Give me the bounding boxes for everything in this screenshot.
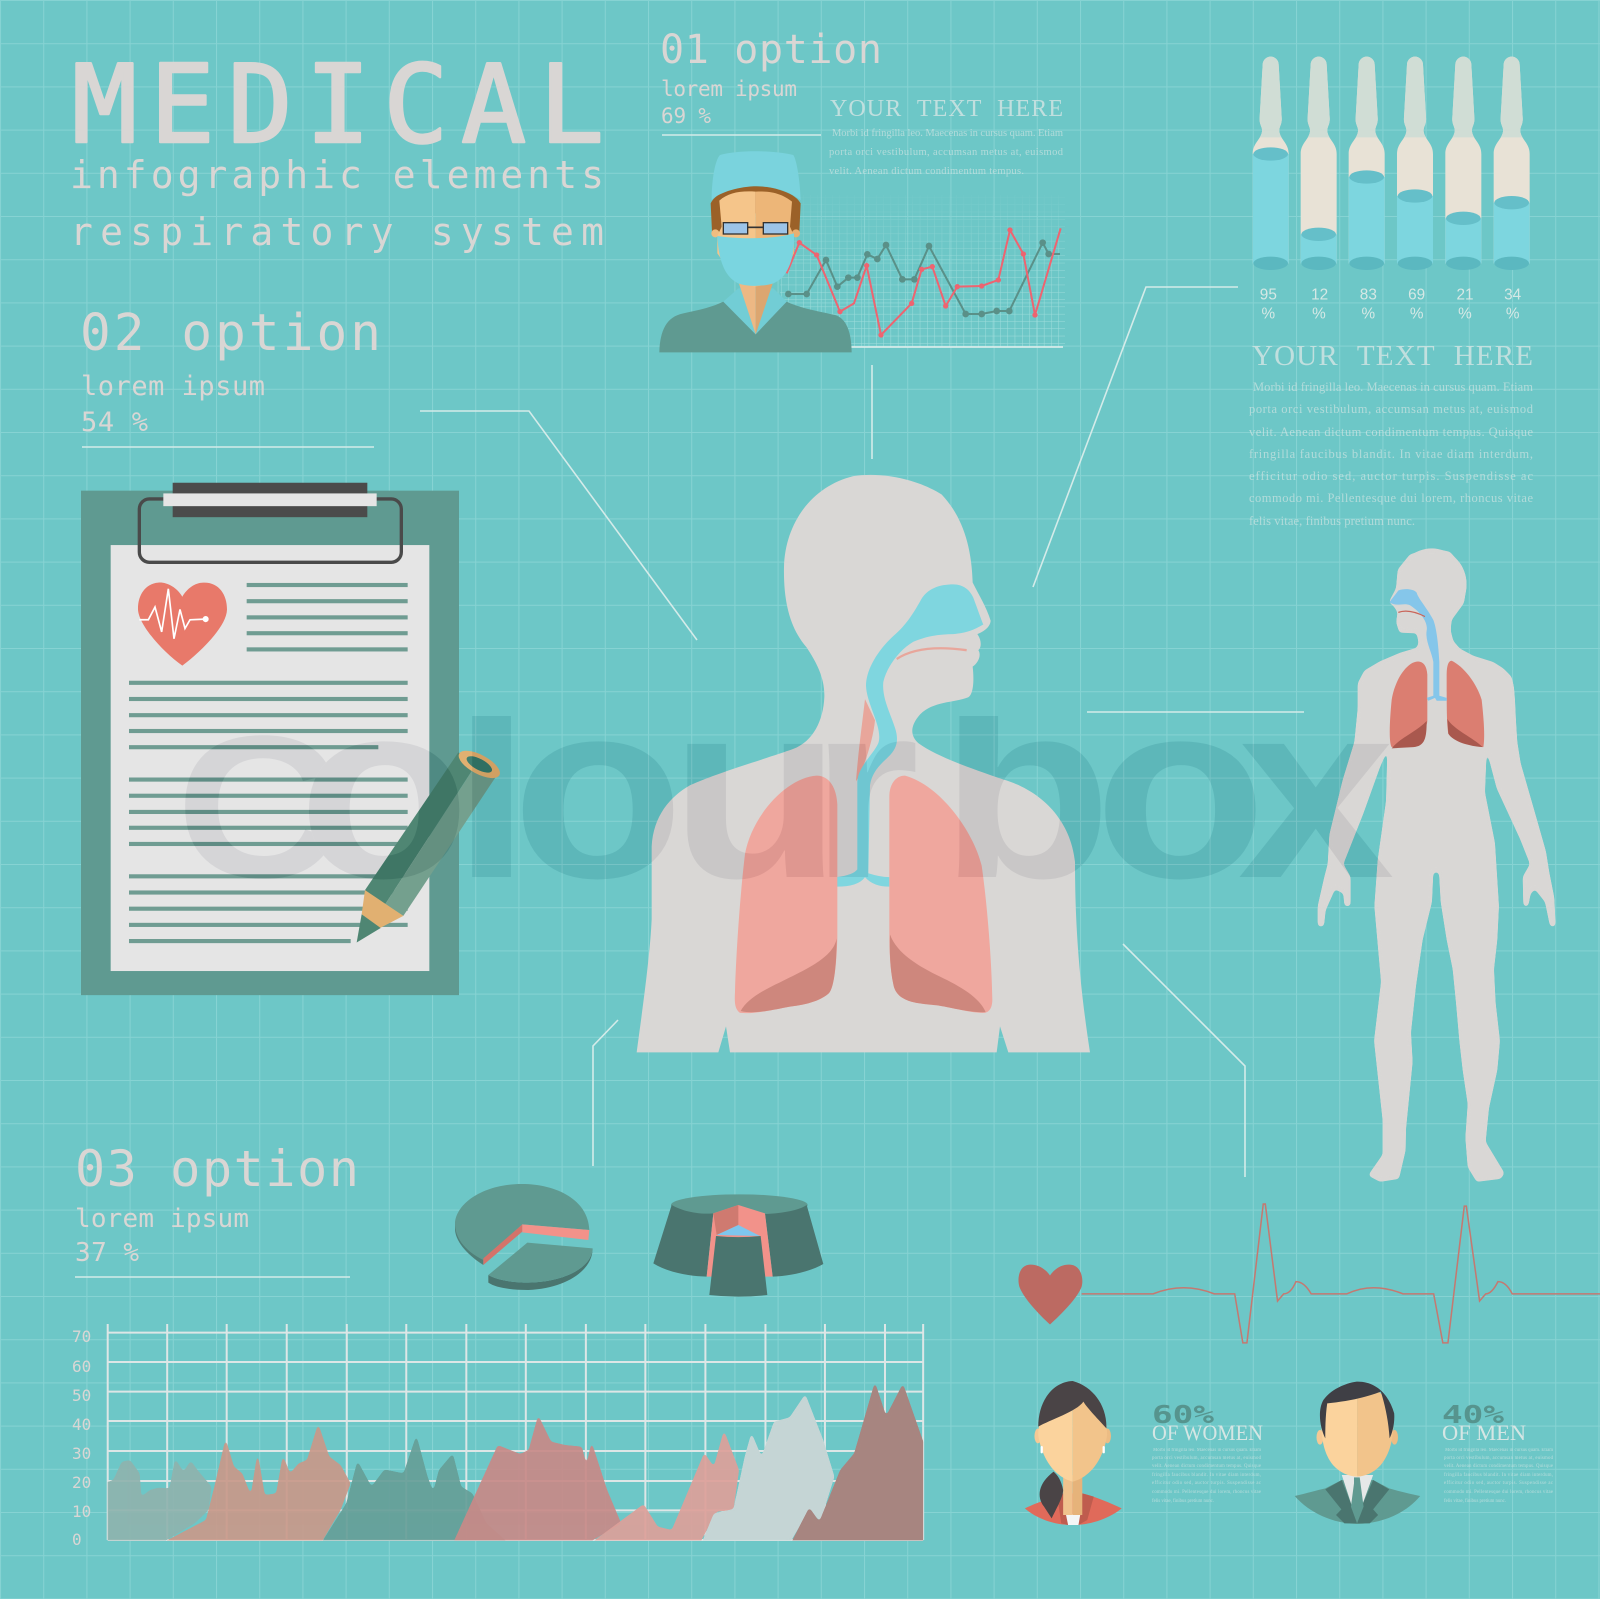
area series 2 [161,1423,351,1543]
body copy (right): felis vitae, finibus pretium nunc. [1249,514,1415,528]
area series group [94,1382,936,1543]
text: lorem ipsum (01): lorem ipsum [661,77,797,101]
body copy (right): efficitur odio sed, auctor turpis. Suspendisse ac [1249,469,1533,483]
ampoule 21 [1445,57,1481,270]
percent labels: 34 [1504,286,1522,303]
option 01 label [660,27,882,135]
percent labels: 69 [1408,286,1425,303]
option 03 label [75,1140,359,1277]
stat: 40% of men [1442,1400,1554,1504]
heading: your text here (right): YOUR TEXT HERE [1252,340,1533,372]
heading: 02 option: 02 option [80,304,381,363]
series: red line [787,227,1061,338]
right lung [889,776,992,1013]
full body figure with lungs [1318,548,1556,1182]
area series 1 [108,1460,212,1540]
ampoule 95 [1253,57,1289,270]
line chart with fine grid [780,195,1065,347]
small copy (men): felis vitae, finibus pretium nunc. [1444,1499,1506,1504]
ampoule 12 [1301,57,1337,270]
stat: 60% of women [1152,1400,1263,1504]
icon: pencil [357,745,504,942]
small copy (women): porta orci vestibulum, accumsan metus at, euismod [1152,1456,1262,1461]
small copy (men): commodo mi. Pellentesque dui lorem, rhoncus vitae [1444,1490,1553,1495]
body copy (right): porta orci vestibulum, accumsan metus at, euismod [1249,402,1534,416]
percent labels: % [1312,306,1326,323]
small copy (women): felis vitae, finibus pretium nunc. [1152,1499,1214,1504]
esophagus [856,699,875,781]
avatar: man [1295,1382,1420,1524]
title block [70,43,604,254]
text lines [129,583,408,943]
small copy (women) [1152,1448,1262,1504]
label: of women: OF WOMEN [1152,1420,1263,1445]
body copy: Morbi id fringilla leo. Maecenas in cursus quam. Etiam [832,128,1063,139]
percent labels: 95 [1260,286,1277,303]
central torso with respiratory system [637,475,1090,1052]
body copy (right): commodo mi. Pellentesque dui lorem, rhoncus vitae [1249,491,1533,505]
y axis labels: 40 [72,1415,91,1434]
small copy (men): efficitur odio sed, auctor turpis. Suspendisse ac [1444,1481,1553,1486]
clipboard with report [81,483,504,995]
text: 54 percent: 54 % [81,407,148,438]
watermark: Colourbox [185,716,1392,880]
subtitle: infographic elements: infographic elements [70,153,604,197]
y axis labels: 0 [72,1530,82,1549]
heading: your text here: YOUR TEXT HERE [830,96,1063,122]
percent labels [1260,286,1522,323]
percent labels: % [1262,306,1276,323]
icon: heart with pulse [138,583,227,666]
small copy (men) [1444,1448,1554,1504]
area series 6 [701,1394,834,1543]
subtitle: respiratory system: respiratory system [70,210,604,254]
percent labels: % [1362,306,1376,323]
pie chart 3D [455,1184,593,1290]
percent labels: 12 [1311,286,1328,303]
series: grey line [785,239,1060,317]
body copy (right): fringilla faucibus blandit. In vitae diam interdum, [1249,447,1533,461]
y axis labels: 50 [72,1386,91,1405]
y axis labels: 20 [72,1473,91,1492]
watermark: Colourbox: olourbox [298,649,1396,931]
area series 7 [792,1385,924,1540]
percent labels: 21 [1456,286,1474,303]
ampoule 34 [1494,57,1530,270]
title: MEDICAL: MEDICAL [72,43,604,168]
body copy: porta orci vestibulum, accumsan metus at, euismod [829,147,1064,158]
y axis labels: 30 [72,1444,91,1463]
watermark: Colourbox: C [176,693,340,920]
text block: your text here (top) [829,96,1064,177]
connector lines [420,287,1304,1177]
small copy (women): fringilla faucibus blandit. In vitae diam interdum, [1152,1473,1261,1478]
text: 37 percent: 37 % [75,1238,139,1268]
small airway [1389,589,1447,701]
area series 3 [321,1435,509,1543]
label: of men: OF MEN [1442,1420,1526,1445]
area chart [72,1324,936,1549]
percent labels: % [1410,306,1424,323]
heartbeat with ECG line [1018,1204,1600,1343]
small copy (women): Morbi id fringilla leo. Maecenas in cursus quam. Etiam [1153,1448,1261,1453]
percent labels: % [1506,306,1520,323]
avatar: woman [1025,1381,1122,1525]
heading: 03 option: 03 option [75,1140,359,1198]
ampoule bar chart [1253,57,1530,323]
body copy [829,128,1064,177]
percent labels: % [1458,306,1472,323]
area series 5 [590,1430,739,1543]
y axis labels [72,1327,91,1549]
percent labels: 83 [1360,286,1377,303]
icon: doctor with mask [659,151,852,352]
small copy (men): fringilla faucibus blandit. In vitae diam interdum, [1444,1473,1553,1478]
chart grid [108,1324,923,1540]
small copy (women): efficitur odio sed, auctor turpis. Suspendisse ac [1152,1481,1261,1486]
airway [837,584,983,887]
ampoule 83 [1349,57,1385,270]
area series 4 [453,1415,621,1543]
y axis labels: 70 [72,1327,91,1346]
number: 40%: 40% [1442,1400,1504,1429]
option 02 label [80,304,381,447]
icon: heart [1018,1265,1082,1324]
text: 69 percent: 69 % [661,104,711,128]
body copy (right) [1249,380,1534,528]
small copy (women): commodo mi. Pellentesque dui lorem, rhoncus vitae [1152,1490,1261,1495]
text block: your text here (right) [1249,340,1534,528]
text: lorem ipsum: lorem ipsum [81,371,265,402]
left lung [735,776,837,1013]
number: 60%: 60% [1152,1400,1214,1429]
small lungs [1390,661,1484,748]
cone chart 3D [653,1194,823,1297]
body copy (right): velit. Aenean dictum condimentum tempus. Quisque [1249,425,1533,439]
ampoule 69 [1397,57,1433,270]
body copy (right): Morbi id fringilla leo. Maecenas in cursus quam. Etiam [1253,380,1533,394]
body copy: velit. Aenean dictum condimentum tempus. [829,166,1024,177]
small copy (men): velit. Aenean dictum condimentum tempus. Quisque [1444,1464,1553,1469]
small copy (men): Morbi id fringilla leo. Maecenas in cursus quam. Etiam [1445,1448,1553,1453]
heading: 01 option: 01 option [660,27,882,73]
y axis labels: 10 [72,1502,91,1521]
text: lorem ipsum (03): lorem ipsum [75,1204,249,1234]
small copy (women): velit. Aenean dictum condimentum tempus. Quisque [1152,1464,1261,1469]
y axis labels: 60 [72,1357,91,1376]
small copy (men): porta orci vestibulum, accumsan metus at, euismod [1444,1456,1554,1461]
tongue line [897,648,967,659]
ECG trace [1082,1204,1600,1343]
